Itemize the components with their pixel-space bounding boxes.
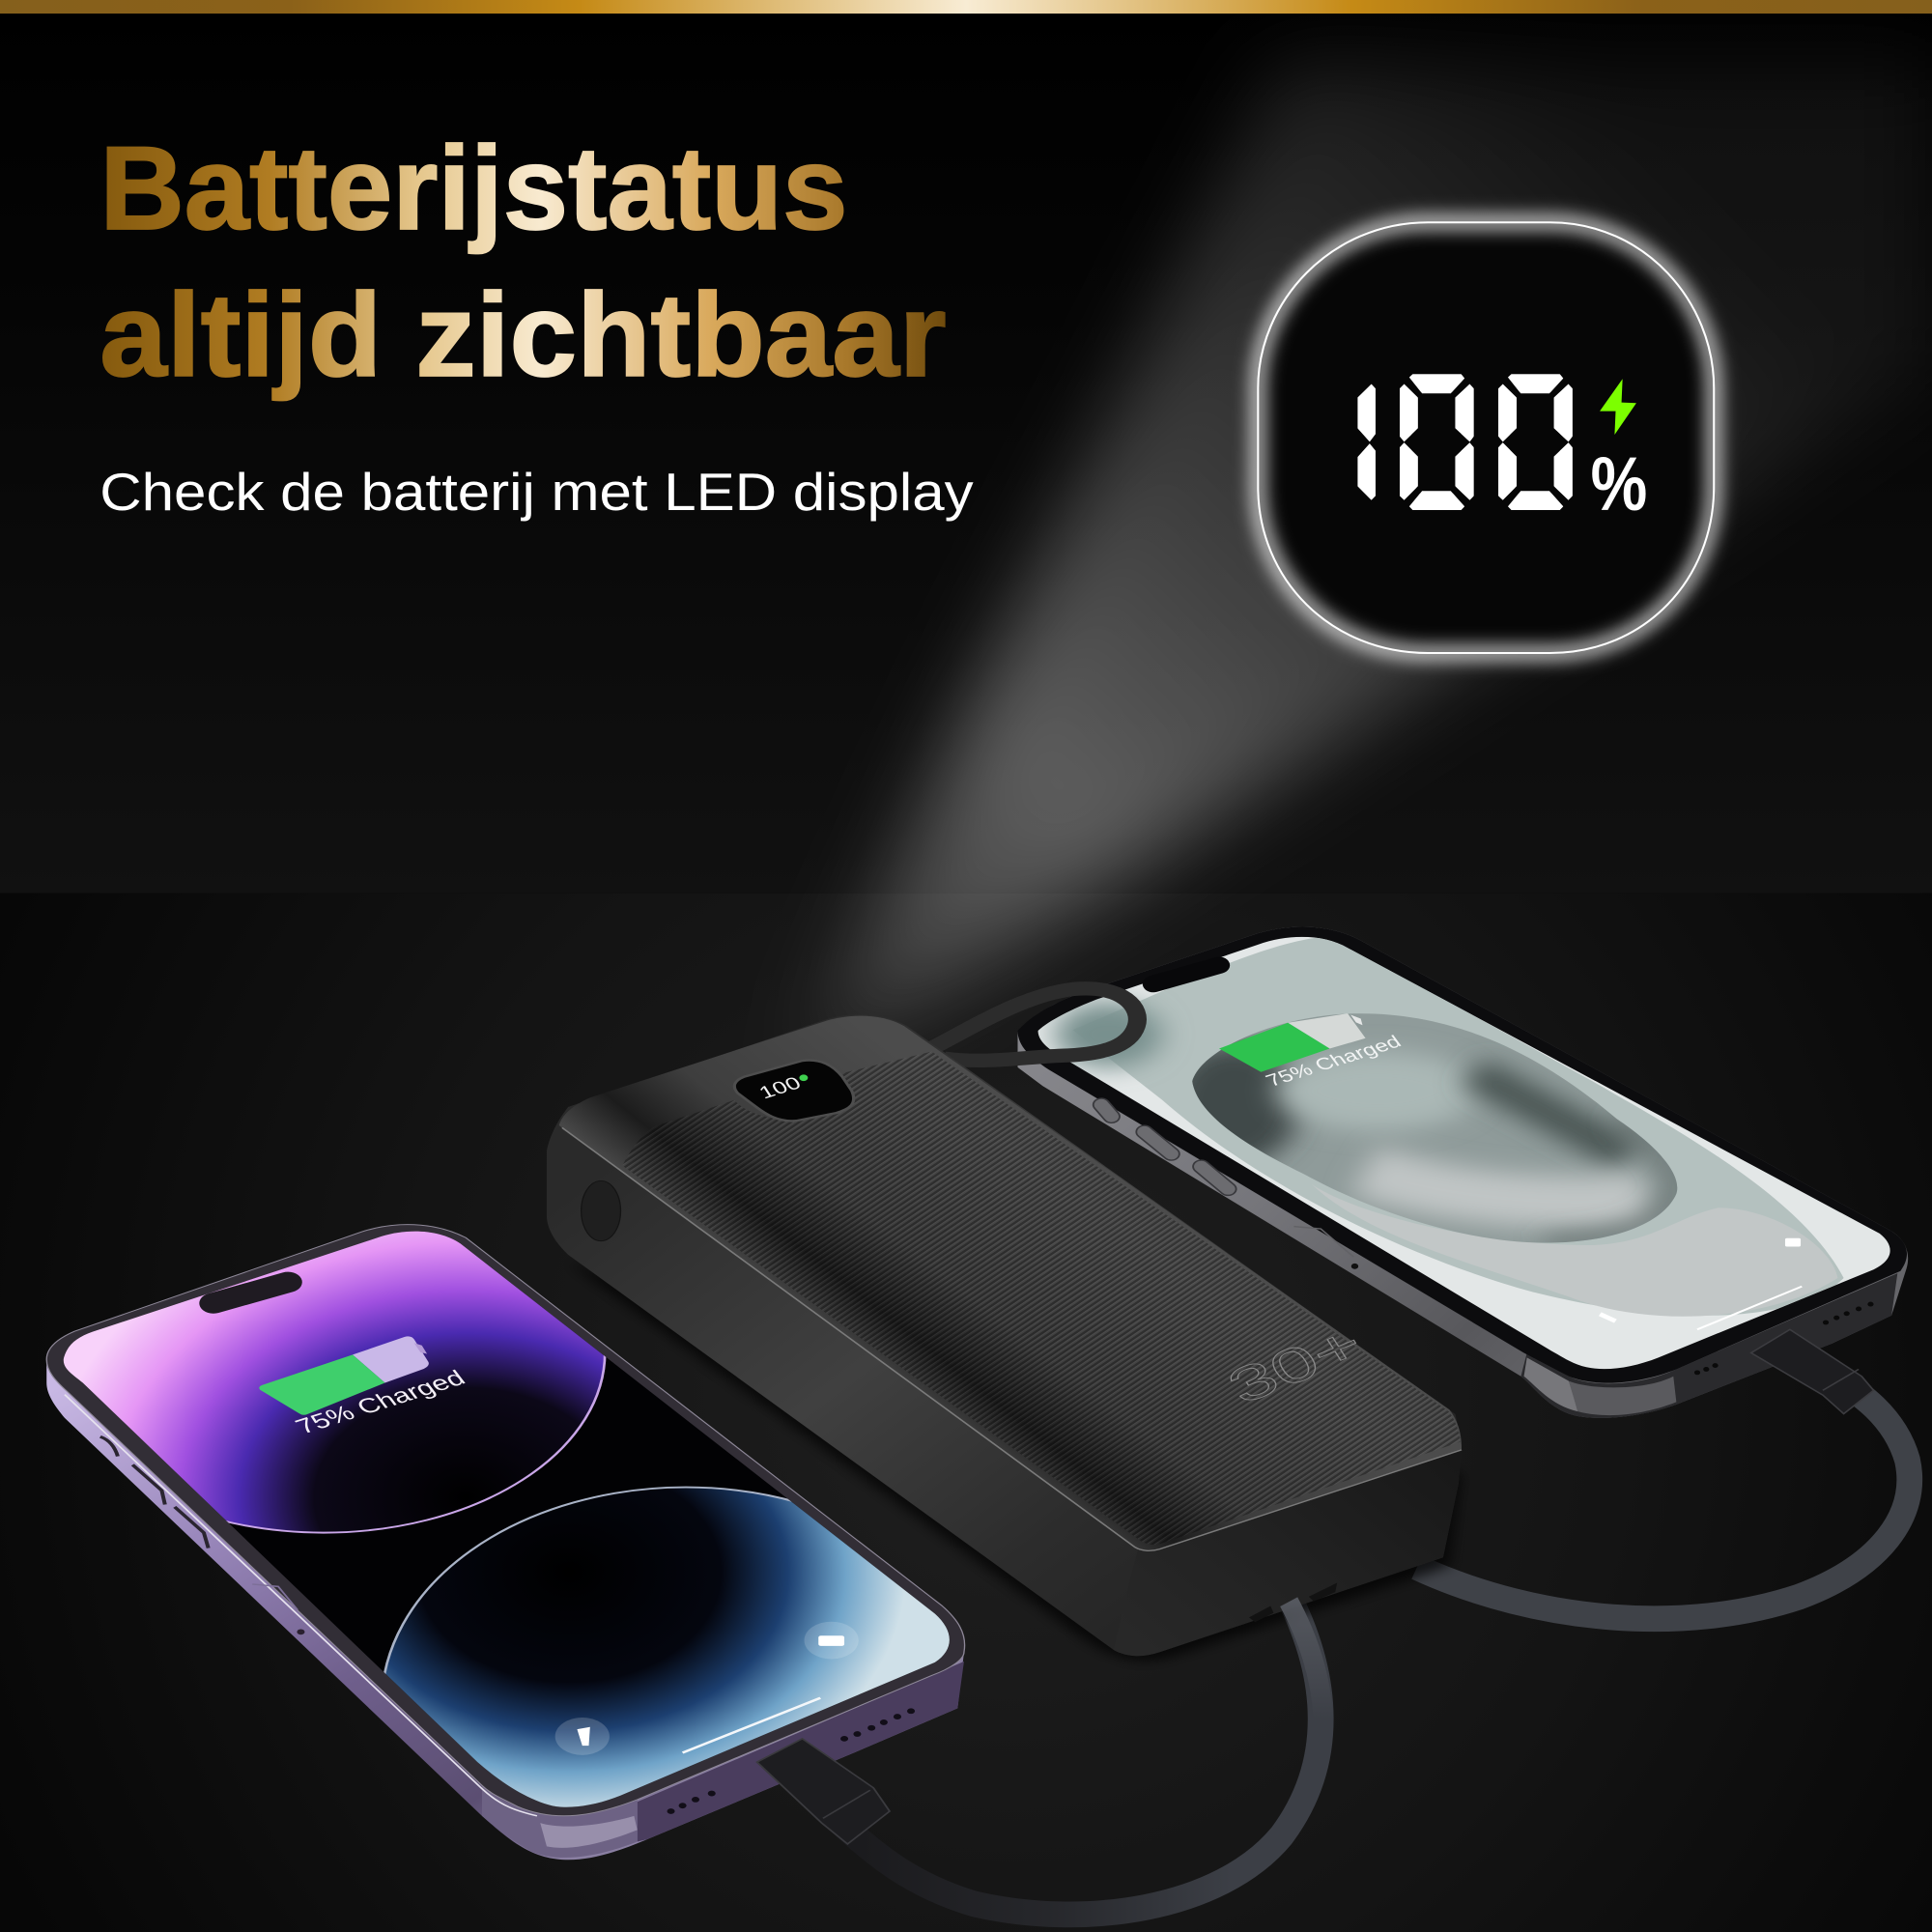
LED digits 100 [1357,374,1573,510]
SIM tray and pin hole [252,1584,298,1610]
battery indicator [259,1336,429,1415]
dynamic island [213,1282,288,1303]
side buttons [100,1436,209,1548]
shadow [568,1262,1462,1661]
flashlight and camera buttons [555,1622,859,1755]
phone body [46,1225,965,1860]
flashlight and camera buttons [1599,1238,1801,1322]
gold top bar [0,0,1932,14]
title: Batterijstatus [99,122,848,254]
power bank [547,1014,1462,1661]
speaker holes [668,1708,915,1814]
background: upper section [0,0,1932,894]
left phone [46,1224,966,1861]
icon: lightning bolt [1600,379,1636,435]
screen wallpaper [64,1231,950,1807]
screen wallpaper [1037,937,1890,1370]
carry loop strap [932,988,1137,1061]
subtitle: Check de batterij met LED display [99,462,974,522]
home indicator [1697,1287,1802,1329]
front edge highlight [562,1127,1462,1550]
LED display badge [1258,222,1714,653]
ribbed texture [622,1051,1461,1545]
lower disc [384,1486,950,1807]
speaker grille [582,1180,620,1241]
connector [757,1739,890,1844]
end face [1114,1450,1462,1656]
light beam from LED display [788,62,1932,1084]
LED window digits: 100 [755,1073,805,1103]
upper disc [64,1231,607,1534]
30+ logo: 30+ [1217,1316,1374,1414]
title [99,122,947,401]
speaker holes [1694,1302,1874,1375]
port notches [1249,1583,1337,1622]
body side [547,1014,1462,1656]
cable: power bank to left phone [844,1597,1321,1915]
battery indicator [1219,1013,1366,1072]
on-screen label right phone: 75% Charged [1263,1033,1406,1091]
cable emerging from power bank [1289,1602,1323,1719]
wallpaper blob [1192,1013,1677,1242]
side buttons [1101,1105,1228,1189]
top face [559,1016,1462,1550]
home indicator [683,1698,820,1752]
LED window [734,1061,854,1121]
connector [1751,1329,1874,1414]
cable: power bank to right phone [1417,1370,1910,1619]
on-screen label left phone: 75% Charged [291,1366,470,1438]
title: altijd zichtbaar [99,269,947,401]
percent sign: % [1591,440,1647,526]
bezel [1017,927,1907,1383]
background: lower section [0,894,1932,1932]
LED window green dot [799,1074,808,1081]
LED digits 100: 1 [1297,314,1435,573]
phone body [1017,927,1908,1418]
SIM tray and pin hole [1293,1227,1353,1257]
right phone [995,908,1932,1423]
dynamic island [1153,965,1219,984]
LED digits 100: 0 [1368,314,1506,573]
bezel [46,1225,965,1816]
LED digits 100: 0 [1466,314,1605,573]
